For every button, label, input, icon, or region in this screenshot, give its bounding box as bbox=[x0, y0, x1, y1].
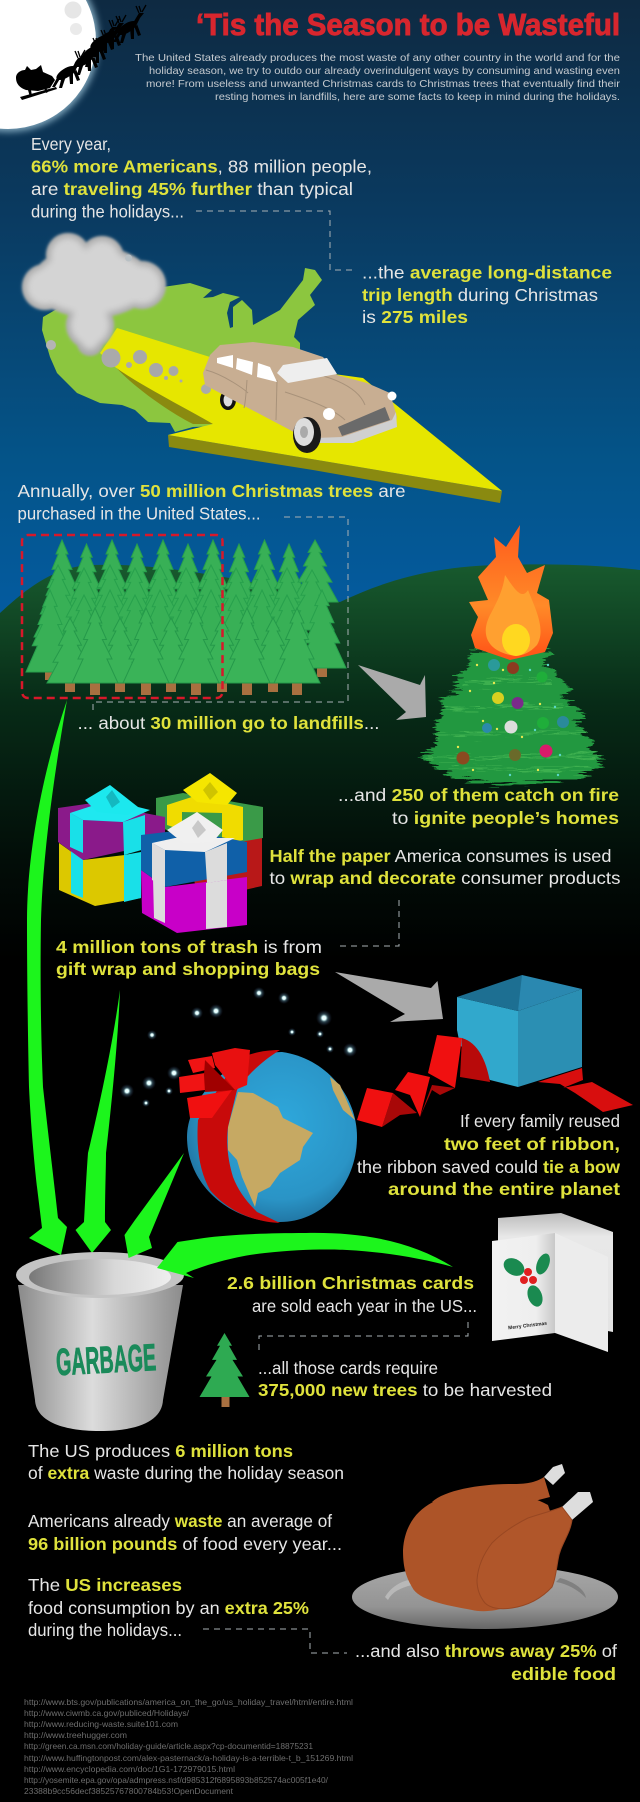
text: travel stat: during the holidays... bbox=[31, 202, 184, 222]
exhaust cloud bbox=[22, 233, 182, 382]
icon: globe wrapped in ribbon bbox=[179, 1048, 357, 1223]
text: trees catch fire: ...and 250 of them catch on fire bbox=[338, 785, 619, 805]
dashed connector: travel bbox=[196, 211, 356, 270]
text: travel stat: are traveling 45% further than typical bbox=[31, 179, 353, 199]
icon: roast turkey on plate bbox=[352, 1464, 618, 1629]
text: trees catch fire bbox=[338, 785, 619, 828]
text: food consumption: during the holidays... bbox=[28, 1620, 182, 1640]
intro paragraph: more! From useless and unwanted Christmas cards to Christmas trees that eventually find their bbox=[146, 78, 621, 90]
text: trees catch fire: to ignite people’s homes bbox=[392, 808, 619, 828]
text: Christmas trees purchased: Annually, over 50 million Christmas trees are bbox=[18, 481, 406, 501]
text: food waste: Americans already waste an average of bbox=[28, 1511, 332, 1531]
text: Christmas cards: are sold each year in the US... bbox=[252, 1296, 477, 1316]
tree row, front bbox=[47, 608, 320, 683]
icon: Christmas card: Merry Christmas bbox=[508, 1321, 548, 1331]
text: landfills: ... about 30 million go to landfills ... bbox=[78, 713, 380, 733]
sources list: http://green.ca.msn.com/holiday-guide/article.aspx?cp-documentid=18875231 bbox=[24, 1741, 313, 1751]
text: trash from gift wrap bbox=[56, 937, 322, 979]
text: paper use: Half the paper America consumes is used bbox=[270, 846, 612, 866]
grey arrow to box bbox=[335, 972, 443, 1022]
green arrow: cards to garbage bbox=[157, 1233, 453, 1278]
intro paragraph: resting homes in landfills, here are some facts to keep in mind during the holidays. bbox=[215, 91, 620, 103]
dashed connector: food bbox=[203, 1629, 347, 1653]
text: trees harvested bbox=[258, 1358, 552, 1400]
sources list: http://www.encyclopedia.com/doc/1G1-172979015.html bbox=[24, 1764, 235, 1774]
grey arrow to burning tree bbox=[358, 665, 426, 720]
flame bbox=[469, 525, 553, 660]
text: Christmas cards bbox=[227, 1273, 477, 1316]
icon: red ribbon from box to globe bbox=[357, 1035, 633, 1127]
tree rows, back bbox=[26, 540, 346, 674]
text: Christmas trees purchased: purchased in the United States... bbox=[18, 504, 260, 524]
dashed connector: cards to trees bbox=[259, 1322, 468, 1355]
tree forest bbox=[26, 540, 346, 695]
text: food consumption: food consumption by an extra 25% bbox=[28, 1598, 309, 1618]
sources list: http://yosemite.epa.gov/opa/admpress.nsf/d985312f6895893b852574ac005f1e40/ bbox=[24, 1775, 329, 1785]
title: ‘Tis the Season to be Wasteful bbox=[196, 7, 620, 42]
text: average trip length bbox=[362, 262, 612, 327]
moon with craters bbox=[0, 0, 99, 132]
text: extra waste bbox=[28, 1441, 344, 1483]
text: average trip length: is 275 miles bbox=[362, 307, 468, 327]
sources list: http://www.huffingtonpost.com/alex-pasternack/a-holiday-is-a-terrible-t_b_151269.html bbox=[24, 1753, 353, 1763]
background: night sky bbox=[0, 0, 640, 640]
green arrow: globe to garbage bbox=[124, 1153, 184, 1258]
text: trash from gift wrap: gift wrap and shopping bags bbox=[56, 959, 320, 979]
green arrow: trees to garbage bbox=[27, 700, 67, 1255]
text: extra waste: The US produces 6 million tons bbox=[28, 1441, 293, 1461]
icon: garbage bucket bbox=[16, 1252, 184, 1431]
text: food waste: 96 billion pounds of food every year... bbox=[28, 1534, 342, 1554]
sources list: http://www.bts.gov/publications/america_on_the_go/us_holiday_travel/html/entire.html bbox=[24, 1697, 353, 1707]
text: travel stat: Every year, bbox=[31, 134, 111, 154]
text: trash from gift wrap: 4 million tons of trash is from bbox=[56, 937, 322, 957]
text: food consumption bbox=[28, 1575, 309, 1640]
map: United States bbox=[42, 268, 322, 432]
dashed connector: trees to landfills bbox=[93, 517, 348, 713]
red dashed landfill selection bbox=[22, 535, 222, 698]
yellow arrow bbox=[100, 328, 502, 503]
icon: small tree bbox=[200, 1333, 250, 1407]
text: trees harvested: 375,000 new trees to be harvested bbox=[258, 1380, 552, 1400]
text: ribbon fact: the ribbon saved could tie a bow bbox=[357, 1157, 620, 1177]
icon: open blue box bbox=[457, 975, 582, 1087]
text: thrown away food: ...and also throws away 25% of bbox=[355, 1641, 617, 1661]
text: ribbon fact: two feet of ribbon, bbox=[444, 1134, 620, 1154]
gift: green and red bbox=[156, 773, 263, 900]
background: dark green hills bbox=[0, 564, 640, 960]
text: travel stat bbox=[31, 134, 372, 222]
text: trees harvested: ...all those cards require bbox=[258, 1358, 438, 1378]
icon: Santa's sleigh and reindeer silhouette bbox=[16, 5, 146, 100]
intro paragraph: holiday season, we try to outdo our already overindulgent ways by consuming and wasting even bbox=[149, 65, 620, 77]
red bow bbox=[179, 1048, 250, 1118]
intro paragraph bbox=[135, 52, 621, 103]
icon: Christmas card bbox=[492, 1213, 613, 1352]
dashed connector: paper to trash bbox=[340, 900, 399, 946]
text: thrown away food: edible food bbox=[511, 1664, 616, 1684]
icon: gift boxes bbox=[58, 773, 263, 933]
text: food consumption: The US increases bbox=[28, 1575, 182, 1595]
gift: blue and magenta bbox=[141, 812, 247, 933]
text: Christmas cards: 2.6 billion Christmas cards bbox=[227, 1273, 474, 1293]
text: average trip length: ...the average long-distance bbox=[362, 262, 612, 282]
sources list: http://www.treehugger.com bbox=[24, 1730, 127, 1740]
text: thrown away food bbox=[355, 1641, 617, 1684]
text: ribbon fact: around the entire planet bbox=[388, 1179, 620, 1199]
text: food waste bbox=[28, 1511, 342, 1554]
text: Christmas trees purchased bbox=[18, 481, 406, 524]
bucket label: GARBAGE bbox=[55, 1337, 157, 1384]
intro paragraph: The United States already produces the most waste of any other country in the world and for the bbox=[135, 52, 620, 64]
text: travel stat: 66% more Americans , 88 million people, bbox=[31, 156, 372, 176]
icon: stars bbox=[120, 987, 357, 1107]
burning Christmas tree bbox=[422, 650, 604, 785]
sources list: http://www.reducing-waste.suite101.com bbox=[24, 1719, 178, 1729]
text: extra waste: of extra waste during the holiday season bbox=[28, 1463, 344, 1483]
sources list: 23388b9cc56decf38525767800784b53!OpenDocument bbox=[24, 1786, 234, 1796]
text: ribbon fact bbox=[357, 1111, 620, 1199]
background: black ground bbox=[0, 640, 640, 1802]
icon: car bbox=[201, 342, 397, 453]
holly leaves and berries bbox=[500, 1252, 553, 1309]
text: paper use bbox=[270, 846, 621, 888]
text: paper use: to wrap and decorate consumer products bbox=[270, 868, 621, 888]
sources list: http://www.ciwmb.ca.gov/publiced/Holidays/ bbox=[24, 1708, 190, 1718]
sources list bbox=[24, 1697, 353, 1796]
gift: purple and yellow bbox=[58, 785, 165, 906]
text: average trip length: trip length during Christmas bbox=[362, 285, 598, 305]
green arrow: gift wrap to garbage bbox=[76, 990, 120, 1253]
text: ribbon fact: If every family reused bbox=[460, 1111, 620, 1131]
